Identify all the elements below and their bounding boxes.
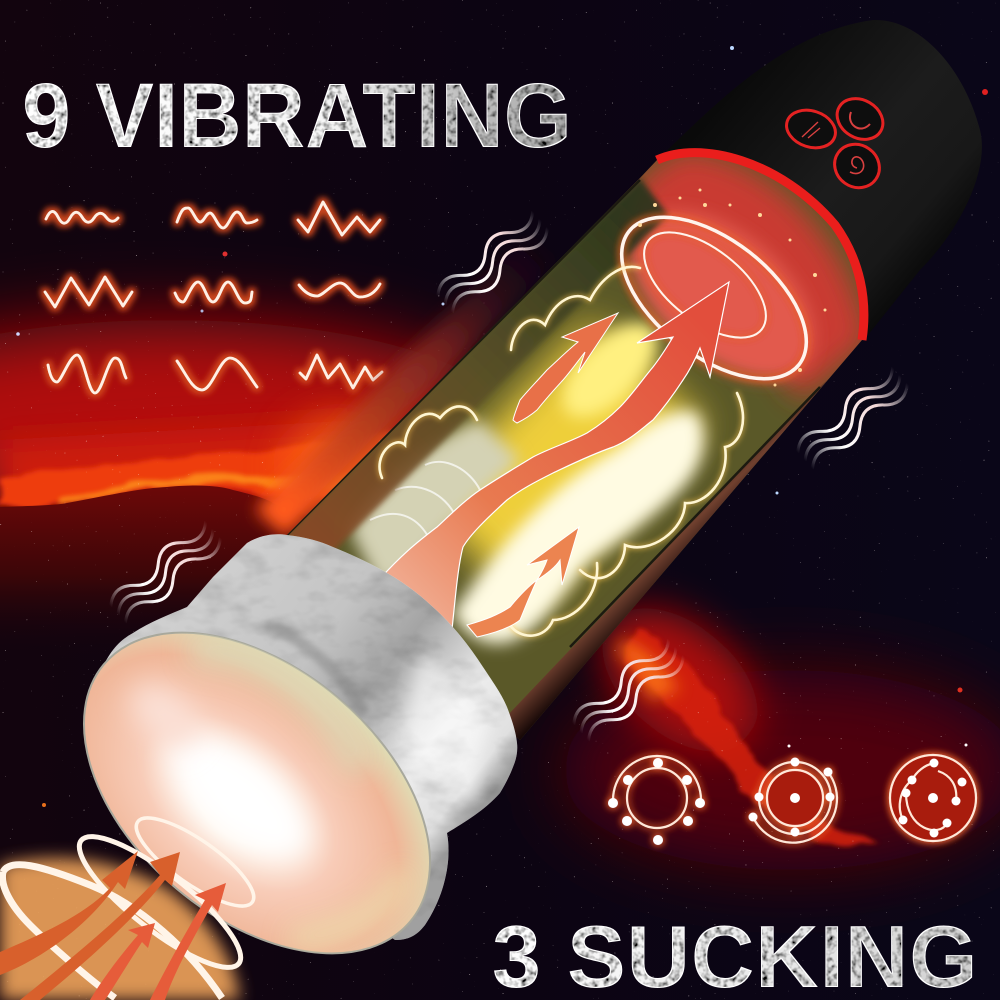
suction pattern icon 2 [748, 758, 837, 843]
reservoir pink zone [624, 206, 818, 390]
reservoir red zone [620, 150, 870, 400]
lower inner wall [510, 379, 828, 740]
suction arrows [0, 851, 226, 1000]
sleeve ridges [370, 462, 480, 540]
vibration lines: right [793, 362, 913, 475]
yellow bright patch [554, 311, 668, 426]
arrow 1 [0, 851, 138, 975]
arrow: upper [513, 313, 618, 423]
vibration lines: lower right [569, 634, 689, 747]
energy rings [613, 209, 813, 387]
rear flange and neck [100, 534, 517, 940]
opening face [83, 632, 431, 954]
clear textured sleeve [350, 420, 520, 590]
wave 4 [45, 277, 132, 307]
suction ring medium [64, 818, 256, 986]
collar highlight [400, 650, 490, 800]
vibration lines: lower left [106, 516, 226, 629]
suction pattern icon 3 [890, 755, 976, 841]
suction ring large [2, 865, 222, 998]
tube exterior glow [255, 230, 560, 537]
glass lines [287, 180, 820, 647]
coil squiggles [380, 267, 743, 636]
bottom glow [0, 858, 240, 1000]
suction ring small [125, 804, 265, 920]
nebula right band [615, 632, 880, 846]
upper inner wall [285, 178, 668, 560]
control button: mode [782, 104, 840, 154]
wave 6 [299, 283, 380, 297]
device: transparent tube [280, 150, 880, 750]
suction pattern icon 1 [608, 756, 705, 845]
arrow 3 [90, 923, 155, 1000]
wave 5 [175, 282, 252, 303]
heading: 9 vibrating: 9 VIBRATING [22, 65, 572, 167]
sparkles [638, 188, 826, 386]
vibration lines: upper left [433, 206, 553, 319]
wave 7 [48, 355, 126, 393]
device: black control cap [657, 20, 982, 335]
nebula left band [0, 415, 395, 680]
vibration pattern icons [45, 202, 382, 393]
arrow: large centre [370, 282, 729, 650]
wave 9 [300, 355, 382, 388]
collar neck shading [265, 625, 365, 715]
wave 3 [298, 202, 380, 235]
control button: suction [830, 91, 890, 147]
red ring [657, 153, 864, 340]
arrow 4 [150, 883, 226, 1000]
wave 1 [46, 211, 118, 223]
wave 2 [177, 208, 257, 228]
control button: vibration [826, 136, 888, 196]
stars [16, 46, 988, 807]
arrow 2 [20, 852, 180, 1000]
white hot sleeve [453, 411, 704, 644]
arrow: lower [467, 527, 579, 637]
collar [100, 534, 517, 940]
suction rings and arrows [0, 804, 265, 1000]
wave 8 [177, 358, 257, 390]
tube yellow core [420, 320, 705, 610]
